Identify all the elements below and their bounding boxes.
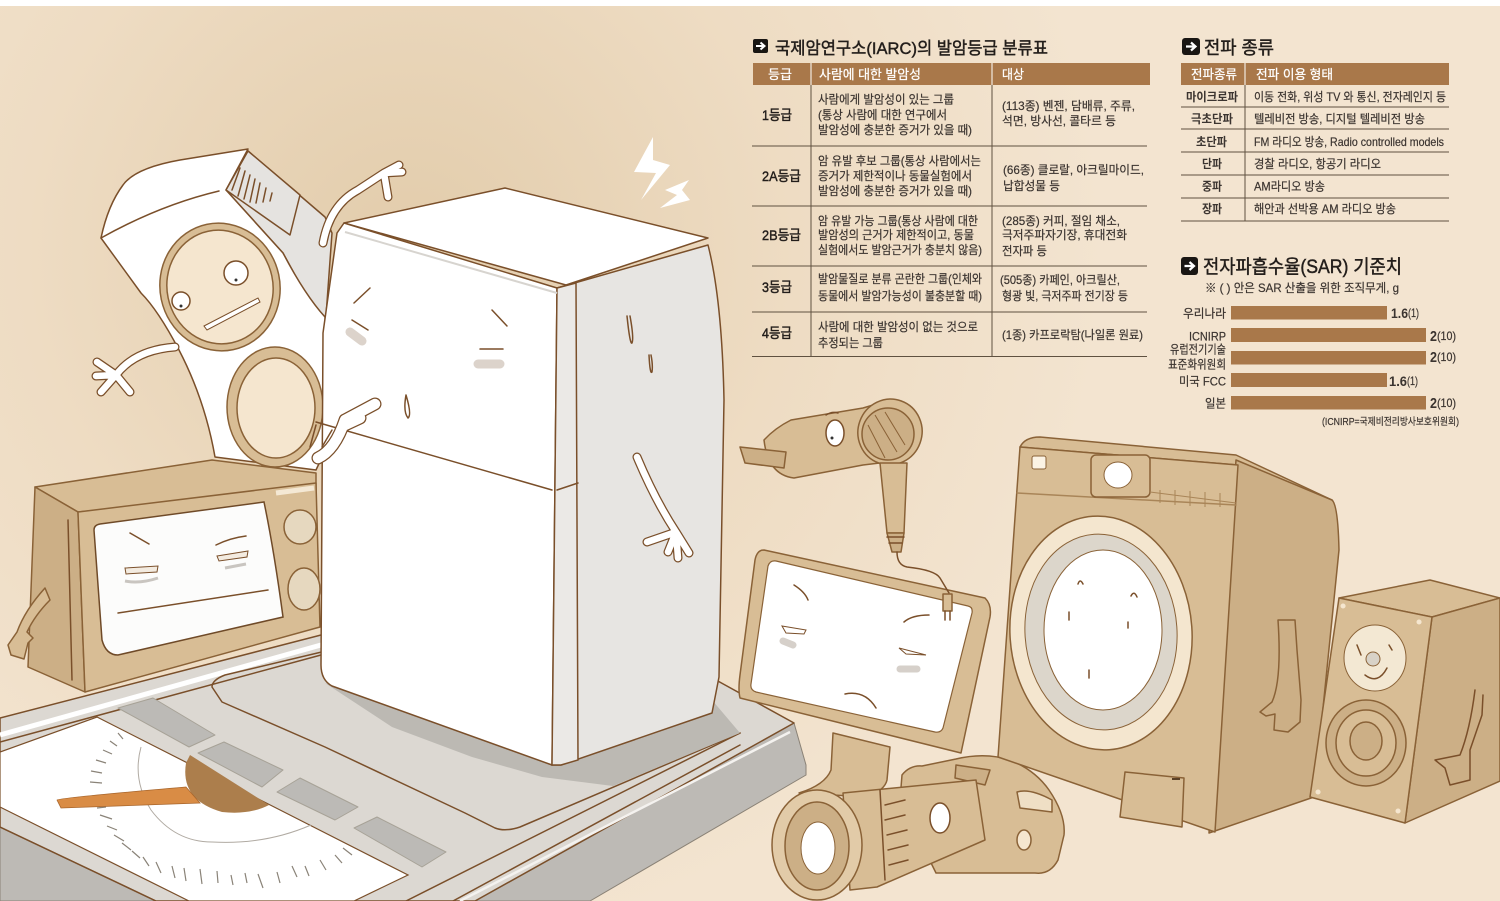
fridge shadow [325, 683, 740, 786]
monitor screen [751, 561, 972, 732]
wave table header: 전파종류 [1191, 67, 1237, 82]
IARC table rules [752, 85, 1147, 356]
dryer back vent [849, 390, 931, 474]
row: grade 1: 발암성에 충분한 증거가 있을 때) [818, 123, 972, 137]
fridge sweat drops [627, 316, 652, 372]
row: grade 2A: 암 유발 후보 그룹(통상 사람에서는 [818, 154, 981, 168]
wave table rows: 텔레비전 방송, 디지털 텔레비전 방송 [1254, 112, 1425, 126]
fridge pointing arm [310, 404, 375, 458]
wave table rows: 중파 [1202, 180, 1222, 194]
wave table rows [1186, 90, 1446, 216]
camera body [900, 756, 1064, 873]
washer top [1020, 437, 1332, 500]
wave table header [1181, 63, 1449, 85]
wave table rows: FM 라디오 방송, Radio controlled models [1254, 135, 1444, 149]
dial needle [57, 787, 200, 808]
SAR category labels: 일본 [1205, 396, 1226, 410]
row: grade 4: 추정되는 그룹 [818, 336, 883, 350]
row: grade 2A: 증거가 제한적이나 동물실험에서 [818, 169, 972, 183]
row: grade 2B [762, 214, 1127, 258]
SAR values: (10) [1437, 350, 1456, 364]
monitor character [739, 550, 990, 797]
row: grade 2B: (285종) 커피, 절임 채소, [1002, 214, 1120, 228]
row: grade 3 [762, 272, 1128, 303]
refrigerator character [310, 188, 724, 765]
row: grade 2B: 전자파 등 [1002, 244, 1047, 258]
row: grade 1: 석면, 방사선, 콜타르 등 [1002, 114, 1116, 128]
dryer handle [880, 463, 907, 533]
row: grade 4 [762, 320, 1143, 350]
washer door ring [1002, 510, 1200, 756]
wave table rows: 장파 [1202, 202, 1222, 216]
SAR subtitle: ※ ( ) 안은 SAR 산출을 위한 조직무게, g [1205, 281, 1399, 295]
wave table rows: 이동 전화, 위성 TV 와 통신, 전자레인지 등 [1254, 90, 1446, 104]
lightning bolts [634, 137, 690, 208]
scale buttons [118, 698, 446, 867]
row: grade 3: 동물에서 발암가능성이 불충분할 때) [818, 289, 982, 303]
SAR values: (10) [1437, 396, 1456, 410]
row: grade 2A: 납합성물 등 [1003, 179, 1060, 193]
IARC table header: 대상 [1002, 67, 1024, 82]
IARC table header [753, 63, 1150, 85]
washer side [1209, 460, 1339, 833]
dial window [0, 717, 408, 901]
microwave knobs [284, 510, 320, 610]
fridge face [350, 288, 507, 418]
white tower speaker character [96, 149, 402, 470]
camera lens barrel [843, 780, 985, 890]
speaker side [1405, 598, 1500, 823]
speaker woofer [1326, 700, 1406, 786]
upper speaker cone with face [148, 212, 292, 362]
scale base top [0, 635, 794, 901]
SAR footnote: (ICNIRP=국제비전리방사보호위원회) [1322, 415, 1459, 428]
wave table rows: 마이크로파 [1186, 90, 1238, 104]
row: grade 1 [762, 92, 1135, 137]
SAR values: (10) [1437, 329, 1456, 343]
microwave screen face [94, 502, 283, 655]
washer front [998, 447, 1238, 832]
microwave character [8, 460, 320, 692]
washer door glass face [1044, 550, 1162, 710]
wave table rules [1181, 85, 1449, 221]
wave table rows: 단파 [1202, 157, 1222, 171]
row: grade 1: 사람에게 발암성이 있는 그룹 [818, 92, 954, 106]
speaker top [1339, 580, 1500, 617]
microwave arm [8, 588, 50, 659]
wave table rows: 경찰 라디오, 항공기 라디오 [1254, 157, 1381, 171]
wave table title: 전파 종류 [1204, 38, 1274, 58]
row: grade 2B: 발암성의 근거가 제한적이고, 동물 [818, 228, 974, 242]
scale base [0, 635, 806, 901]
SAR values: 1.6 [1391, 305, 1408, 321]
lower speaker cone [227, 347, 323, 467]
wave table header: 전파 이용 형태 [1256, 67, 1333, 82]
monitor frame [739, 550, 990, 753]
raised plate outline [212, 650, 740, 830]
row: grade 2A: 2A등급 [762, 168, 801, 184]
wave table rows: 초단파 [1196, 135, 1227, 149]
camera lens front [772, 790, 862, 900]
row: grade 1: (113종) 벤젠, 담배류, 주류, [1002, 99, 1135, 113]
row: grade 4: (1종) 카프로락탐(나일론 원료) [1002, 328, 1143, 342]
speaker arm left [96, 347, 175, 392]
SAR category labels: 표준화위원회 [1168, 358, 1226, 372]
SAR bars [1231, 306, 1426, 410]
monitor stand [799, 733, 890, 797]
camera character [772, 756, 1064, 900]
row: grade 2B: 2B등급 [762, 227, 801, 243]
SAR values: 1.6 [1389, 373, 1407, 389]
SAR values [1389, 305, 1456, 412]
monitor face [782, 585, 929, 708]
SAR values: 2 [1430, 349, 1437, 366]
speaker arm [1435, 690, 1483, 785]
fridge front [321, 223, 557, 765]
speaker arm right [323, 165, 402, 243]
camera eye [930, 803, 950, 833]
row: grade 1: (통상 사람에 대한 연구에서 [818, 108, 947, 122]
washer dial [1091, 455, 1150, 497]
row: grade 2B: 암 유발 가능 그룹(통상 사람에 대한 [818, 214, 978, 228]
SAR values: (1) [1408, 306, 1419, 320]
IARC table header: 사람에 대한 발암성 [819, 67, 921, 82]
fridge side arm [637, 457, 689, 558]
washing machine character [998, 437, 1339, 833]
scale base side [0, 723, 806, 901]
speaker front [1310, 598, 1432, 823]
small speaker character [1310, 580, 1500, 823]
IARC table section [752, 39, 1150, 356]
IARC title: 국제암연구소(IARC)의 발암등급 분류표 [775, 39, 1048, 58]
SAR values: 2 [1430, 328, 1437, 345]
row: grade 2A: 발암성에 충분한 증거가 있을 때) [818, 184, 972, 198]
row: grade 3: 발암물질로 분류 곤란한 그룹(인체와 [818, 272, 982, 286]
dryer eye [826, 412, 844, 446]
speaker tweeter face [1344, 625, 1406, 691]
row: grade 2B: 극저주파자기장, 휴대전화 [1002, 228, 1127, 242]
row: grade 2A: (66종) 클로랄, 아크릴마이드, [1003, 163, 1144, 177]
SAR category labels: 미국 FCC [1179, 374, 1226, 388]
dryer nozzle [740, 447, 786, 468]
row: grade 2B: 실험에서도 발암근거가 충분치 않음) [818, 243, 982, 257]
row: grade 3: 형광 빛, 극저주파 전기장 등 [1002, 289, 1128, 303]
SAR category labels: 유럽전기기술 [1170, 342, 1226, 356]
SAR values: 2 [1430, 395, 1437, 412]
row: grade 4: 사람에 대한 발암성이 없는 것으로 [818, 320, 978, 334]
SAR category labels [1168, 306, 1226, 410]
wave table rows: 해안과 선박용 AM 라디오 방송 [1254, 202, 1396, 216]
row: grade 3: 3등급 [762, 279, 792, 295]
SAR category labels: 우리나라 [1183, 306, 1226, 320]
IARC table header: 등급 [768, 67, 792, 82]
SAR values: (1) [1407, 374, 1418, 388]
wave table rows: AM라디오 방송 [1254, 180, 1325, 194]
fridge right side [552, 245, 724, 765]
dial pivot [185, 755, 269, 813]
SAR category labels: ICNIRP [1189, 330, 1226, 344]
row: grade 2A [762, 154, 1144, 198]
SAR title: 전자파흡수율(SAR) 기준치 [1203, 256, 1402, 278]
washer lower hatch [1120, 772, 1184, 827]
wave table rows: 극초단파 [1191, 112, 1233, 126]
washer arm [1260, 620, 1301, 732]
hair dryer character [740, 390, 952, 620]
fridge top [344, 188, 708, 285]
row: grade 3: (505종) 카페인, 아크릴산, [1000, 273, 1120, 287]
row: grade 1: 1등급 [762, 107, 792, 123]
SAR bar chart [1168, 256, 1459, 428]
row: grade 4: 4등급 [762, 325, 792, 341]
dryer cord and plug [897, 552, 952, 620]
dryer body [764, 400, 905, 478]
radio wave types table [1181, 38, 1449, 221]
